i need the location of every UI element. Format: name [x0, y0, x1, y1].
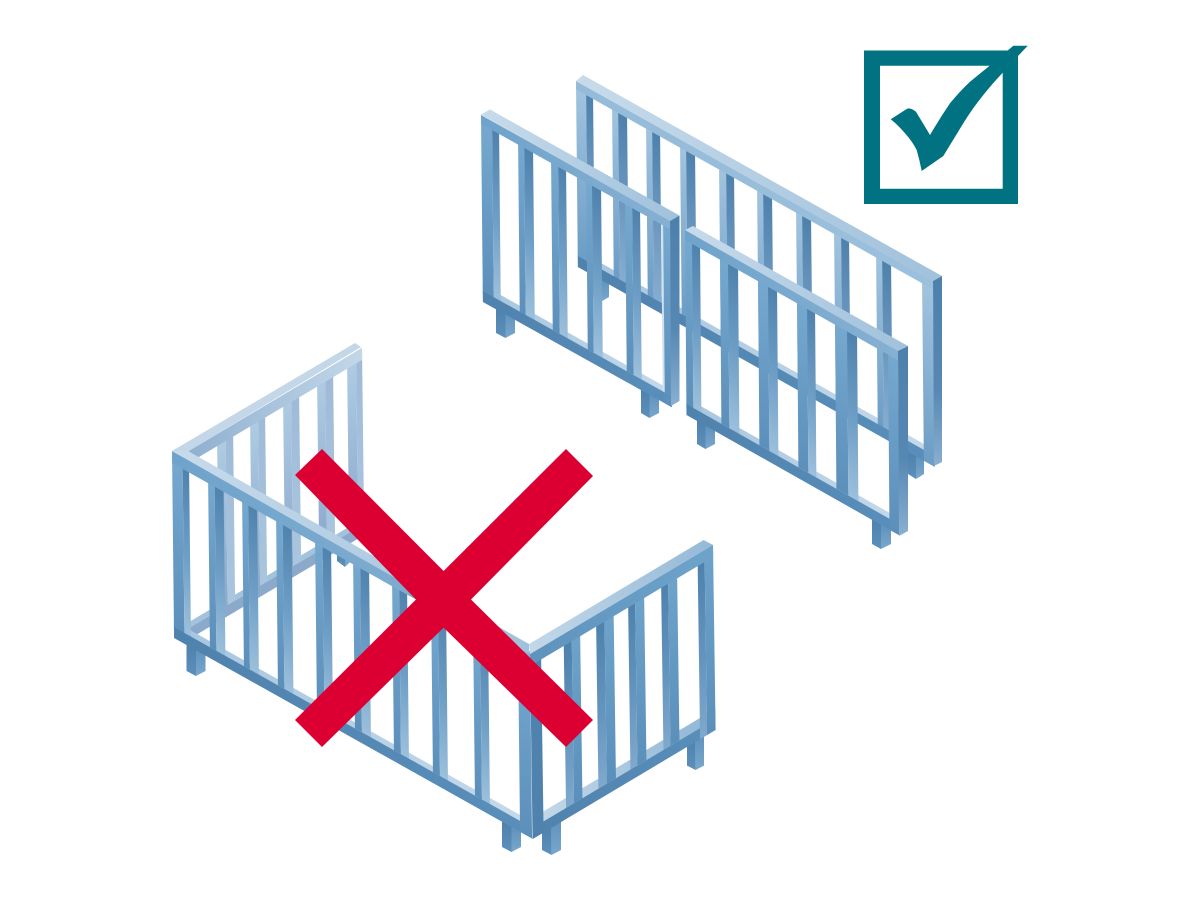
front right fence panel [685, 226, 908, 549]
feet of front right panel [697, 419, 891, 549]
feet of front left panel [496, 305, 659, 418]
foot of far side [337, 537, 351, 567]
back fence panel [576, 75, 942, 479]
top surface of far side [172, 343, 361, 452]
rails and bars of front left panel [481, 115, 672, 407]
check mark [891, 46, 1028, 171]
feet of short right side [542, 731, 704, 855]
front left fence panel [481, 110, 680, 418]
top surface of front left panel [481, 110, 680, 221]
top surface of front right panel [685, 226, 908, 351]
check box frame [864, 50, 1018, 204]
feet of back panel [592, 273, 924, 479]
assembled fence, short right side [529, 540, 716, 855]
rails and bars of far side [187, 348, 364, 639]
rails and bars of back panel [576, 81, 935, 467]
assembled fence, far side [172, 343, 364, 639]
rails and bars of long front side [172, 451, 532, 838]
end face of front left panel [670, 216, 680, 406]
top surface of back panel [576, 75, 942, 281]
icon: red cross [295, 449, 593, 747]
rails and bars of front right panel [685, 230, 899, 535]
icon: teal check box [864, 46, 1028, 204]
assembled fence, long front side [172, 451, 532, 852]
top surface of short right side [529, 540, 713, 654]
end face of front right panel [898, 346, 908, 536]
rails and bars of short right side [530, 545, 716, 839]
top surface of long front side [172, 451, 529, 654]
feet of long front side [186, 642, 521, 852]
end face of back panel [933, 276, 942, 466]
